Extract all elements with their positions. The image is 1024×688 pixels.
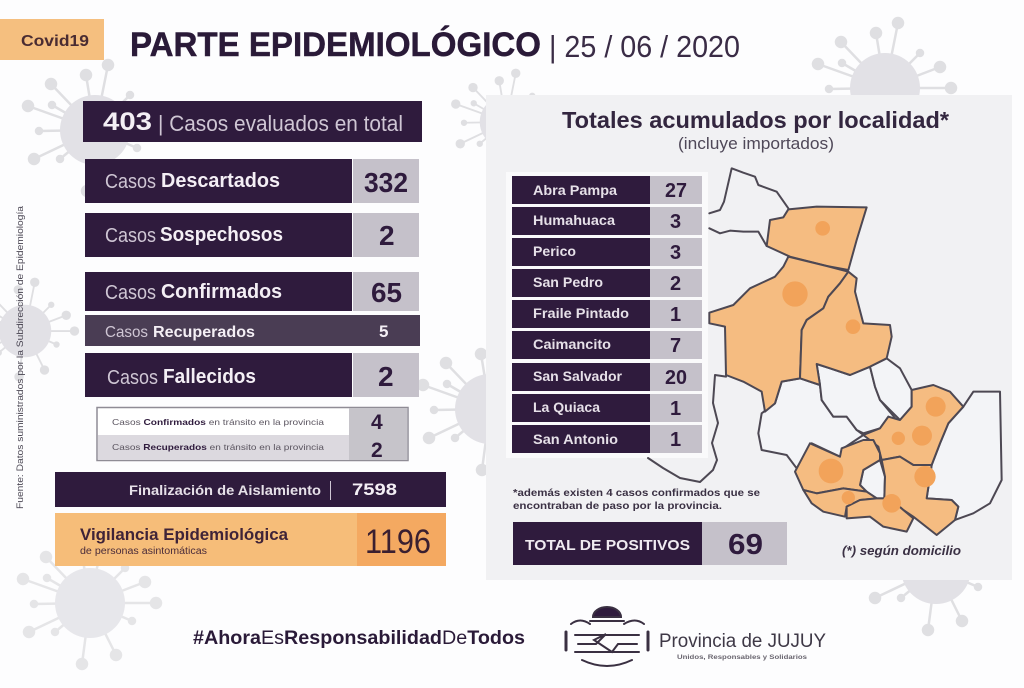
bar: total evaluated cases: 403 [103, 108, 152, 136]
logo: Provincia de Jujuy: Provincia de JUJUY [659, 631, 826, 652]
row: confirmados: Confirmados [161, 281, 282, 303]
row: confirmados: Casos [105, 282, 156, 304]
row: San Salvador: San Salvador [533, 368, 623, 384]
row: Caimancito: Caimancito [533, 336, 611, 352]
row: Perico: 3 [670, 242, 681, 264]
bar: vigilancia epidemiológica: 1196 [365, 523, 431, 561]
footnote: *además existen 4 casos confirmados que se [513, 487, 760, 499]
footnote [513, 487, 760, 512]
panel: totals by locality background [486, 95, 1012, 580]
row: Fraile Pintado: 1 [670, 304, 681, 326]
box: cases in transit: Casos Recuperados en tránsito en la provincia [112, 442, 324, 452]
heading: totales acumulados [562, 107, 949, 153]
row: sospechosos: Casos [105, 225, 156, 247]
title: | 25 / 06 / 2020 [549, 29, 740, 64]
row: confirmados: 65 [371, 277, 402, 308]
note: según domicilio: (*) según domicilio [842, 544, 961, 558]
total positives: TOTAL DE POSITIVOS [525, 537, 690, 554]
row: San Antonio: San Antonio [533, 431, 618, 447]
row: Humahuaca [512, 207, 702, 235]
row: fallecidos: Casos [107, 367, 158, 389]
total positives: 69 [728, 529, 763, 561]
row: sospechosos: 2 [379, 220, 395, 251]
bar: total evaluated cases: | Casos evaluados en total [158, 111, 403, 136]
heading: totales acumulados: (incluye importados) [678, 135, 834, 153]
logo: Provincia de Jujuy [566, 607, 826, 666]
bar: vigilancia epidemiológica: Vigilancia Epidemiológica [80, 526, 289, 544]
row: Abra Pampa: Abra Pampa [533, 182, 617, 198]
row: La Quiaca: La Quiaca [533, 399, 600, 415]
row: La Quiaca [512, 394, 702, 422]
row: recuperados [85, 315, 420, 346]
map: case dots [782, 221, 946, 513]
bar: finalización de aislamiento: 7598 [352, 481, 397, 499]
total positives [513, 522, 787, 565]
box: cases in transit: 2 [371, 439, 383, 462]
row: sospechosos: Sospechosos [160, 224, 283, 246]
row: Abra Pampa: 27 [665, 180, 687, 202]
row: La Quiaca: 1 [670, 398, 681, 420]
footnote: encontraban de paso por la provincia. [513, 500, 722, 512]
source note: Fuente: Datos suministrados por la Subdirección de Epidemiología [15, 205, 26, 509]
bar: finalización de aislamiento: Finalización de Aislamiento [129, 482, 321, 498]
row: San Salvador [512, 363, 702, 391]
table: cases per locality [506, 172, 708, 458]
row: Abra Pampa [512, 176, 702, 204]
row: Caimancito: 7 [670, 335, 681, 357]
box: cases in transit: Casos Confirmados en tránsito en la provincia [112, 417, 324, 427]
tag: Covid19: Covid19 [21, 33, 89, 50]
row: Perico [512, 238, 702, 266]
hashtag: #AhoraEsResponsabilidadDeTodos [193, 627, 525, 649]
logo: Provincia de Jujuy: Unidos, Responsables y Solidarios [677, 654, 807, 661]
row: Caimancito [512, 331, 702, 359]
row: Humahuaca: 3 [670, 211, 681, 233]
title [130, 26, 740, 64]
row: San Salvador: 20 [665, 367, 687, 389]
row: descartados [85, 159, 419, 203]
row: San Pedro: San Pedro [533, 274, 603, 290]
row: confirmados [85, 272, 419, 311]
heading: totales acumulados: Totales acumulados por localidad* [562, 107, 949, 133]
row: fallecidos [85, 353, 419, 397]
row: fallecidos: 2 [378, 361, 394, 392]
row: sospechosos [85, 213, 419, 257]
box: cases in transit [97, 408, 408, 462]
bar: finalización de aislamiento [55, 472, 446, 507]
row: Fraile Pintado [512, 300, 702, 328]
row: descartados: 332 [364, 167, 408, 198]
bar: total evaluated cases [83, 101, 422, 142]
bar: vigilancia epidemiológica [55, 513, 446, 566]
row: San Pedro: 2 [670, 273, 681, 295]
row: descartados: Descartados [161, 170, 280, 192]
row: San Pedro [512, 269, 702, 297]
icon: shield with handshake [566, 607, 648, 666]
map: Jujuy departments [648, 168, 1002, 535]
row: recuperados: 5 [379, 322, 388, 341]
row: recuperados: Casos [105, 324, 148, 341]
row: fallecidos: Fallecidos [163, 366, 256, 388]
row: Humahuaca: Humahuaca [533, 212, 615, 228]
row: recuperados: Recuperados [153, 324, 255, 341]
row: descartados: Casos [105, 171, 156, 193]
tag: Covid19 [0, 19, 104, 60]
box: cases in transit: 4 [371, 411, 383, 434]
row: San Antonio: 1 [670, 429, 681, 451]
title: PARTE EPIDEMIOLÓGICO [130, 26, 541, 64]
row: San Antonio [512, 425, 702, 453]
row: Fraile Pintado: Fraile Pintado [533, 305, 629, 321]
row: Perico: Perico [533, 243, 576, 259]
bar: vigilancia epidemiológica: de personas asintomáticas [80, 546, 207, 557]
